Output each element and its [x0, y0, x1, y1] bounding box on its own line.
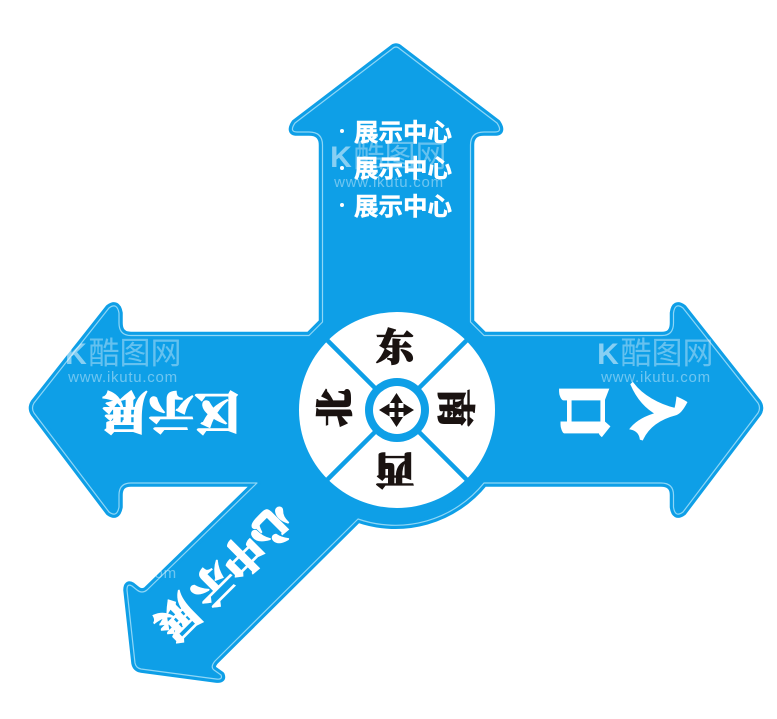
watermark: top: [330, 139, 446, 191]
label: west arrow, exhibition area: 展: [102, 386, 148, 436]
text block: north arrow list: 展示中心: [354, 119, 452, 147]
watermark: right: www.ikutu.com: [600, 369, 711, 386]
watermark: left: K: [65, 338, 87, 371]
label: south-west arrow, exhibition centre: 展: [145, 585, 208, 648]
label: south-west arrow, exhibition centre: 示: [178, 552, 243, 618]
label: south: 南: [433, 389, 475, 427]
watermark: left: 酷图网: [88, 336, 182, 371]
label: south-west arrow, exhibition centre: 中: [209, 523, 272, 586]
watermark: top: K: [330, 141, 352, 174]
watermark: right: K: [597, 338, 619, 371]
watermark: right: 酷图网: [620, 336, 714, 371]
label: east arrow, entrance: 入: [624, 383, 686, 439]
label: west arrow, exhibition area: [102, 386, 240, 436]
compass disc: [299, 312, 495, 508]
text block: north arrow list: [340, 119, 452, 221]
icon: four-way arrows: [379, 393, 414, 427]
text block: north arrow list: 展示中心: [354, 155, 452, 183]
label: west arrow, exhibition area: 区: [194, 386, 240, 436]
watermark: lower left: www.ikutu.com: [66, 565, 177, 582]
watermark: top: 酷图网: [354, 139, 446, 174]
label: north: 北: [315, 389, 357, 427]
label: east arrow, entrance: [551, 383, 686, 439]
label: south-west arrow, exhibition centre: [145, 494, 302, 648]
label: south-west arrow, exhibition centre: 心: [235, 494, 302, 562]
watermark: left: [65, 336, 182, 386]
label: east: 东: [376, 328, 418, 370]
watermark: right: [597, 336, 714, 386]
watermark: left: www.ikutu.com: [67, 369, 178, 386]
label: west arrow, exhibition area: 示: [145, 386, 194, 436]
text block: north arrow list: 展示中心: [354, 193, 452, 221]
label: west: 西: [376, 447, 414, 489]
label: east arrow, entrance: 口: [551, 383, 613, 439]
watermark: top: www.ikutu.com: [333, 174, 444, 191]
